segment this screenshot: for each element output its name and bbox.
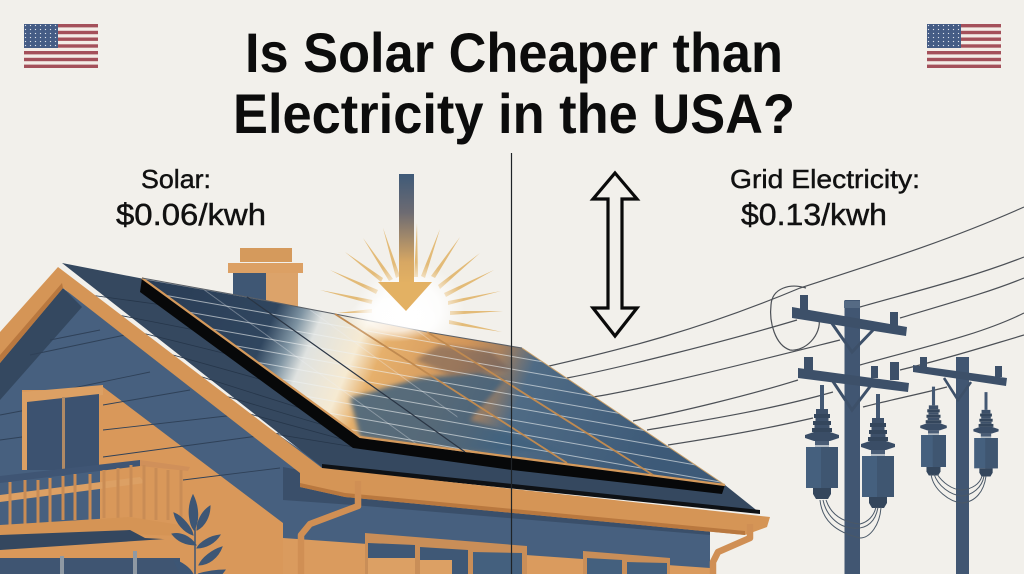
transformer wires <box>820 500 881 538</box>
title: Is Solar Cheaper than <box>245 21 783 84</box>
utility pole left <box>792 295 909 574</box>
small transformers <box>920 387 999 476</box>
glow over panels <box>347 294 443 342</box>
solar price label: $0.06/kwh <box>116 197 266 232</box>
transformers <box>805 385 895 508</box>
comparison double arrow <box>593 173 637 336</box>
sun rays <box>320 223 503 332</box>
utility pole right <box>913 357 1007 574</box>
lower windows <box>365 533 670 574</box>
window upper <box>22 385 103 470</box>
solar price label: Solar: <box>141 164 211 194</box>
gutter downpipes <box>301 481 750 574</box>
small transformer wires <box>931 474 986 503</box>
chimney <box>228 248 303 309</box>
power lines <box>545 207 1024 445</box>
sun glow <box>355 262 465 358</box>
roof <box>62 263 760 514</box>
roof fascia <box>0 267 770 535</box>
title: Electricity in the USA? <box>233 82 795 145</box>
panel frames <box>142 278 725 485</box>
solar price label <box>116 164 266 232</box>
grid electricity price label: $0.13/kwh <box>741 197 887 232</box>
balcony <box>0 460 190 574</box>
sunlight arrow <box>378 174 432 311</box>
title <box>233 21 795 145</box>
icon: US flag left <box>24 24 98 68</box>
grid electricity price label: Grid Electricity: <box>730 164 920 194</box>
plant <box>172 495 225 574</box>
grid electricity price label <box>730 164 920 232</box>
solar panel shadow <box>140 278 725 494</box>
solar panels <box>141 277 726 486</box>
house wall <box>0 285 710 574</box>
icon: US flag right <box>927 24 1001 68</box>
divider line <box>510 153 512 574</box>
